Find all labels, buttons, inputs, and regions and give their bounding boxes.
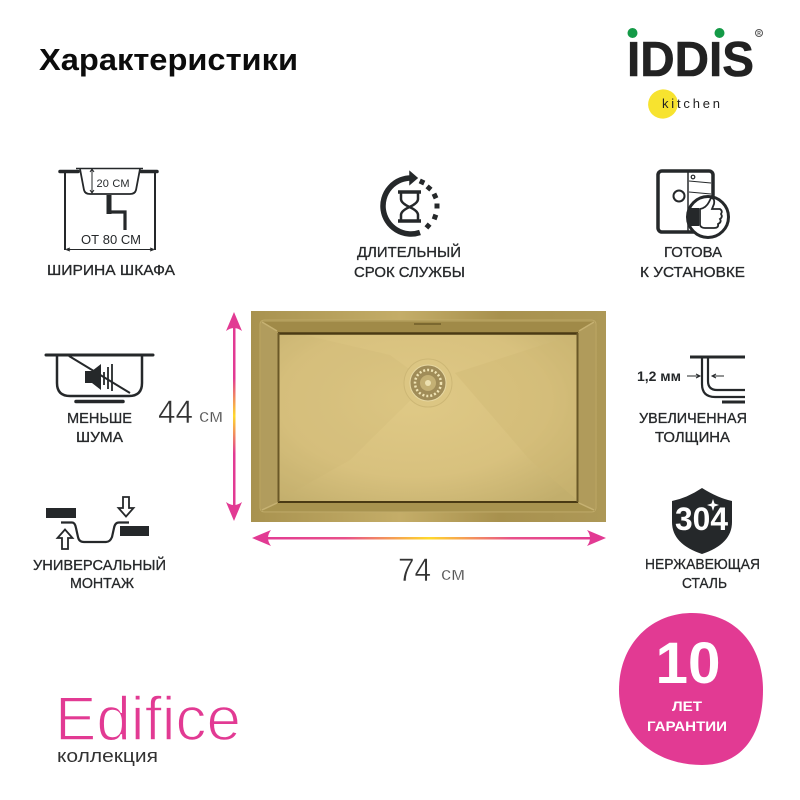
dimension: 74 cm bbox=[398, 552, 465, 588]
label: stainless steel: НЕРЖАВЕЮЩАЯ bbox=[645, 556, 760, 573]
dimension: 44 cm: 44 bbox=[158, 394, 193, 430]
label: long service life: ДЛИТЕЛЬНЫЙ bbox=[357, 243, 461, 261]
arrow: width bbox=[252, 530, 606, 546]
icon: increased thickness bbox=[637, 357, 745, 402]
label: long service life: СРОК СЛУЖБЫ bbox=[354, 264, 465, 281]
label: less noise: ШУМА bbox=[76, 429, 123, 446]
logo: IDDIS kitchen: IDDIS bbox=[627, 33, 754, 87]
label: increased thickness bbox=[639, 410, 747, 446]
label: stainless steel bbox=[645, 556, 760, 592]
label: stainless steel: СТАЛЬ bbox=[682, 575, 727, 592]
warranty badge bbox=[619, 613, 763, 765]
icon: cabinet width bbox=[60, 168, 157, 251]
label: ready to install: ГОТОВА bbox=[664, 244, 722, 261]
label: less noise: МЕНЬШЕ bbox=[67, 410, 132, 427]
title: Характеристики bbox=[39, 42, 298, 77]
label: universal mounting: УНИВЕРСАЛЬНЫЙ bbox=[33, 556, 166, 574]
sink photo bbox=[251, 311, 606, 522]
warranty badge: 10 bbox=[656, 631, 720, 696]
icon: cabinet width: 20 СМ bbox=[96, 178, 130, 190]
dimension: 74 cm: см bbox=[441, 564, 465, 584]
collection name: коллекция bbox=[57, 746, 158, 766]
warranty badge: ЛЕТ bbox=[672, 698, 702, 714]
label: less noise bbox=[67, 410, 132, 446]
label: universal mounting: МОНТАЖ bbox=[70, 575, 134, 592]
label: long service life bbox=[354, 243, 465, 281]
icon: cabinet width: ОТ 80 СМ bbox=[81, 232, 141, 247]
icon: long service life bbox=[383, 172, 440, 234]
label: cabinet width: ШИРИНА ШКАФА bbox=[47, 262, 175, 279]
icon: 304 steel shield: 304 bbox=[675, 501, 728, 537]
icon: increased thickness: 1,2 мм bbox=[637, 368, 681, 384]
dimension: 44 cm bbox=[158, 394, 223, 430]
logo: IDDIS kitchen bbox=[627, 28, 762, 123]
icon: 304 steel shield bbox=[672, 488, 732, 554]
label: increased thickness: УВЕЛИЧЕННАЯ bbox=[639, 410, 747, 427]
label: increased thickness: ТОЛЩИНА bbox=[655, 429, 730, 446]
label: ready to install: К УСТАНОВКЕ bbox=[640, 264, 745, 281]
icon: less noise bbox=[46, 355, 153, 402]
dimension: 44 cm: см bbox=[199, 406, 223, 426]
icon: ready to install bbox=[658, 171, 728, 238]
logo: IDDIS kitchen: R bbox=[757, 31, 761, 37]
icon: universal mounting bbox=[46, 497, 149, 549]
logo: IDDIS kitchen: kitchen bbox=[662, 96, 720, 111]
arrow: height bbox=[226, 312, 242, 521]
warranty badge: ГАРАНТИИ bbox=[647, 718, 727, 734]
dimension: 74 cm: 74 bbox=[398, 552, 431, 588]
label: universal mounting bbox=[33, 556, 166, 592]
label: ready to install bbox=[640, 244, 745, 281]
collection name: Edifice bbox=[55, 685, 241, 754]
